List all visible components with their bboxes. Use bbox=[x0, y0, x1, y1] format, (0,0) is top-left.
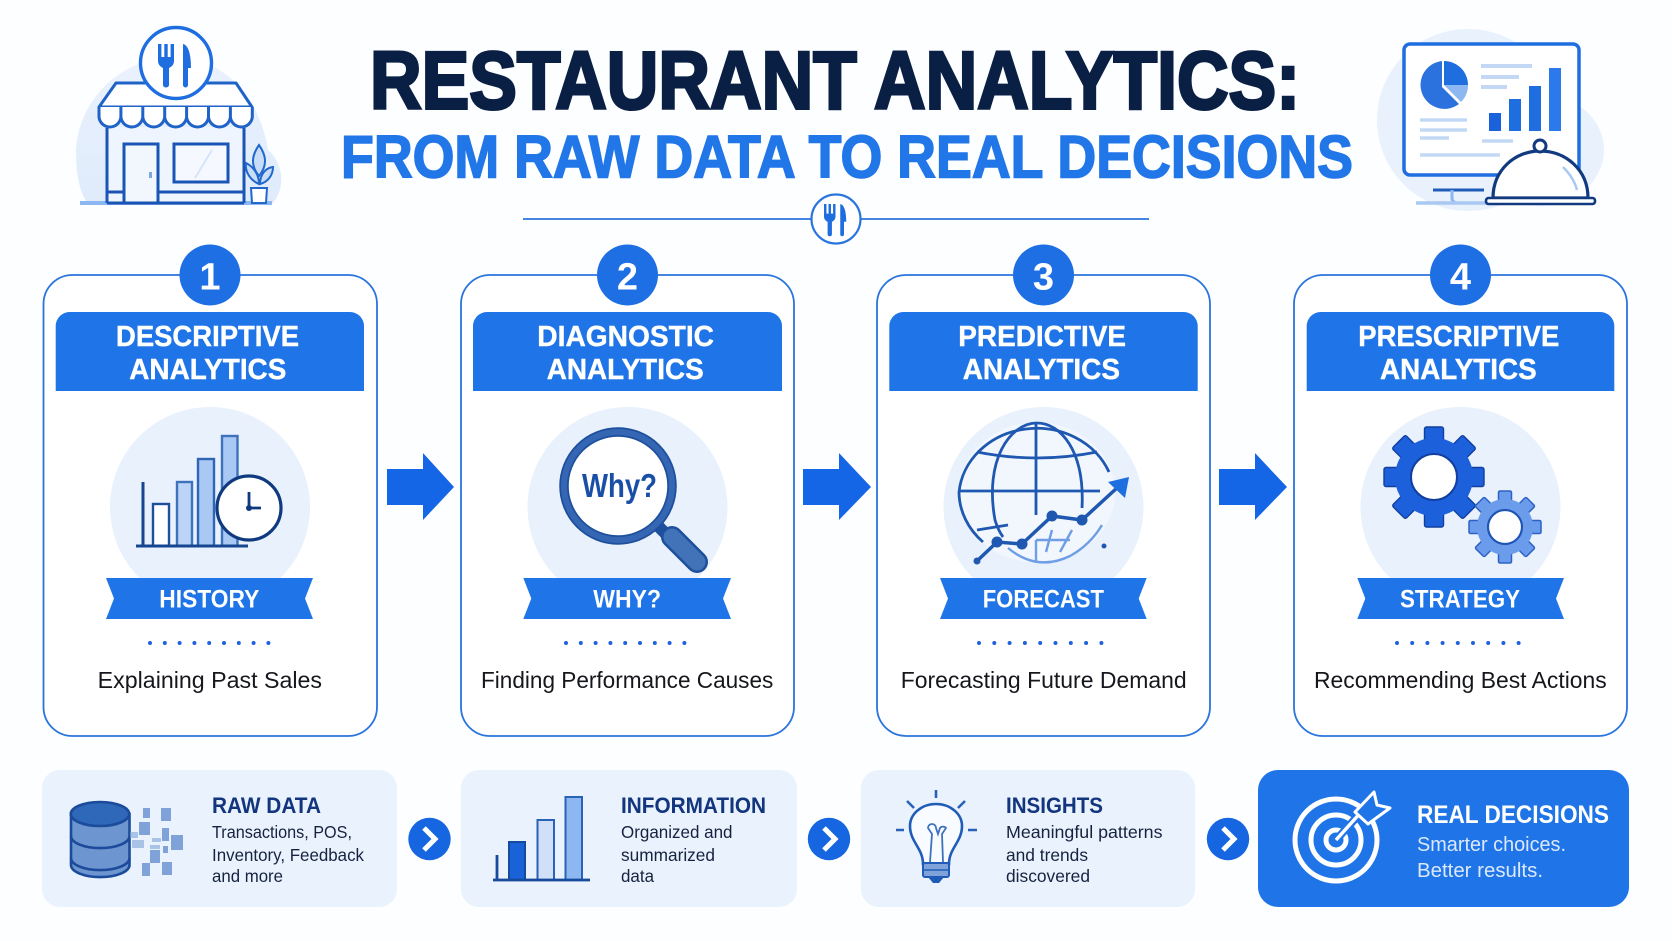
icon: magnifying glass bbox=[528, 407, 728, 607]
text: insights: Meaningful patterns bbox=[1006, 822, 1163, 842]
panel: descriptive analytics bbox=[44, 244, 377, 736]
panel: insights bbox=[861, 770, 1195, 907]
icon: bar chart with clock bbox=[110, 407, 310, 607]
arrow bbox=[387, 453, 454, 520]
description: Explaining Past Sales bbox=[98, 667, 322, 693]
title: FROM RAW DATA TO REAL DECISIONS bbox=[341, 124, 1353, 190]
heading: prescriptive analytics: PRESCRIPTIVE bbox=[1358, 321, 1559, 353]
icon: bar chart bbox=[493, 797, 590, 880]
text: insights: INSIGHTS bbox=[1006, 793, 1103, 818]
step number 2 bbox=[597, 244, 658, 306]
text: real decisions: Smarter choices. bbox=[1417, 834, 1566, 856]
heading: diagnostic analytics: DIAGNOSTIC bbox=[537, 321, 714, 353]
ribbon: why bbox=[523, 578, 731, 619]
icon: dashboard monitor with cloche bbox=[1377, 29, 1604, 211]
title bbox=[341, 36, 1353, 190]
step number 2: 2 bbox=[617, 256, 638, 298]
ribbon: strategy: STRATEGY bbox=[1400, 586, 1520, 614]
text: insights bbox=[1006, 793, 1163, 886]
text: raw data: Inventory, Feedback bbox=[212, 845, 364, 865]
ribbon: history bbox=[106, 578, 313, 619]
ribbon: forecast: FORECAST bbox=[983, 586, 1104, 614]
heading: predictive analytics: ANALYTICS bbox=[963, 354, 1120, 386]
step number 4 bbox=[1430, 244, 1491, 306]
heading: predictive analytics bbox=[889, 312, 1198, 391]
text: raw data: Transactions, POS, bbox=[212, 822, 352, 842]
icon: database bbox=[71, 802, 183, 877]
heading: diagnostic analytics: ANALYTICS bbox=[547, 354, 704, 386]
ribbon: why: WHY? bbox=[593, 586, 661, 614]
heading: prescriptive analytics bbox=[1307, 312, 1614, 391]
icon: restaurant storefront bbox=[76, 28, 281, 205]
heading: predictive analytics: PREDICTIVE bbox=[958, 321, 1126, 353]
panel: information bbox=[461, 770, 797, 907]
icon: target with arrow bbox=[1295, 792, 1390, 881]
panel: raw data bbox=[42, 770, 397, 907]
text: raw data: RAW DATA bbox=[212, 793, 321, 818]
description: Finding Performance Causes bbox=[481, 667, 773, 693]
panel: prescriptive analytics bbox=[1294, 244, 1627, 736]
ribbon: forecast bbox=[940, 578, 1147, 619]
ribbon: strategy bbox=[1357, 578, 1564, 619]
heading: prescriptive analytics: ANALYTICS bbox=[1380, 354, 1537, 386]
text: insights: and trends bbox=[1006, 845, 1088, 865]
panel: real decisions bbox=[1258, 770, 1629, 907]
text: information bbox=[621, 793, 766, 886]
chevron button bbox=[408, 818, 451, 860]
text: information: Organized and bbox=[621, 822, 732, 842]
step number 1 bbox=[180, 244, 240, 306]
panel: predictive analytics bbox=[877, 244, 1210, 736]
heading: diagnostic analytics bbox=[473, 312, 782, 391]
description: Forecasting Future Demand bbox=[901, 667, 1187, 693]
divider with cutlery icon bbox=[523, 194, 1149, 244]
panel: diagnostic analytics bbox=[461, 244, 794, 736]
heading: descriptive analytics bbox=[56, 312, 364, 391]
chevron button bbox=[1207, 818, 1249, 860]
text: information: data bbox=[621, 866, 654, 886]
text: information: INFORMATION bbox=[621, 793, 766, 818]
chevron button bbox=[808, 818, 850, 860]
text: real decisions bbox=[1417, 801, 1609, 882]
heading: descriptive analytics: ANALYTICS bbox=[129, 354, 286, 386]
icon: gears bbox=[1360, 407, 1560, 607]
icon: globe with trend line bbox=[944, 407, 1144, 607]
step number 4: 4 bbox=[1450, 256, 1471, 298]
heading: descriptive analytics: DESCRIPTIVE bbox=[116, 321, 299, 353]
icon: light bulb bbox=[896, 790, 977, 883]
text: raw data: and more bbox=[212, 866, 283, 886]
step number 1: 1 bbox=[199, 256, 221, 298]
step number 3 bbox=[1013, 244, 1074, 306]
text: real decisions: Better results. bbox=[1417, 860, 1543, 882]
text: insights: discovered bbox=[1006, 866, 1090, 886]
title: RESTAURANT ANALYTICS: bbox=[370, 36, 1300, 126]
ribbon: history: HISTORY bbox=[159, 586, 260, 614]
description: Recommending Best Actions bbox=[1314, 667, 1607, 693]
text: information: summarized bbox=[621, 845, 715, 865]
text: real decisions: REAL DECISIONS bbox=[1417, 801, 1609, 829]
text: raw data bbox=[212, 793, 364, 886]
step number 3: 3 bbox=[1033, 256, 1054, 298]
icon: magnifying glass: Why? bbox=[582, 467, 657, 504]
arrow bbox=[803, 453, 871, 520]
arrow bbox=[1219, 453, 1287, 520]
